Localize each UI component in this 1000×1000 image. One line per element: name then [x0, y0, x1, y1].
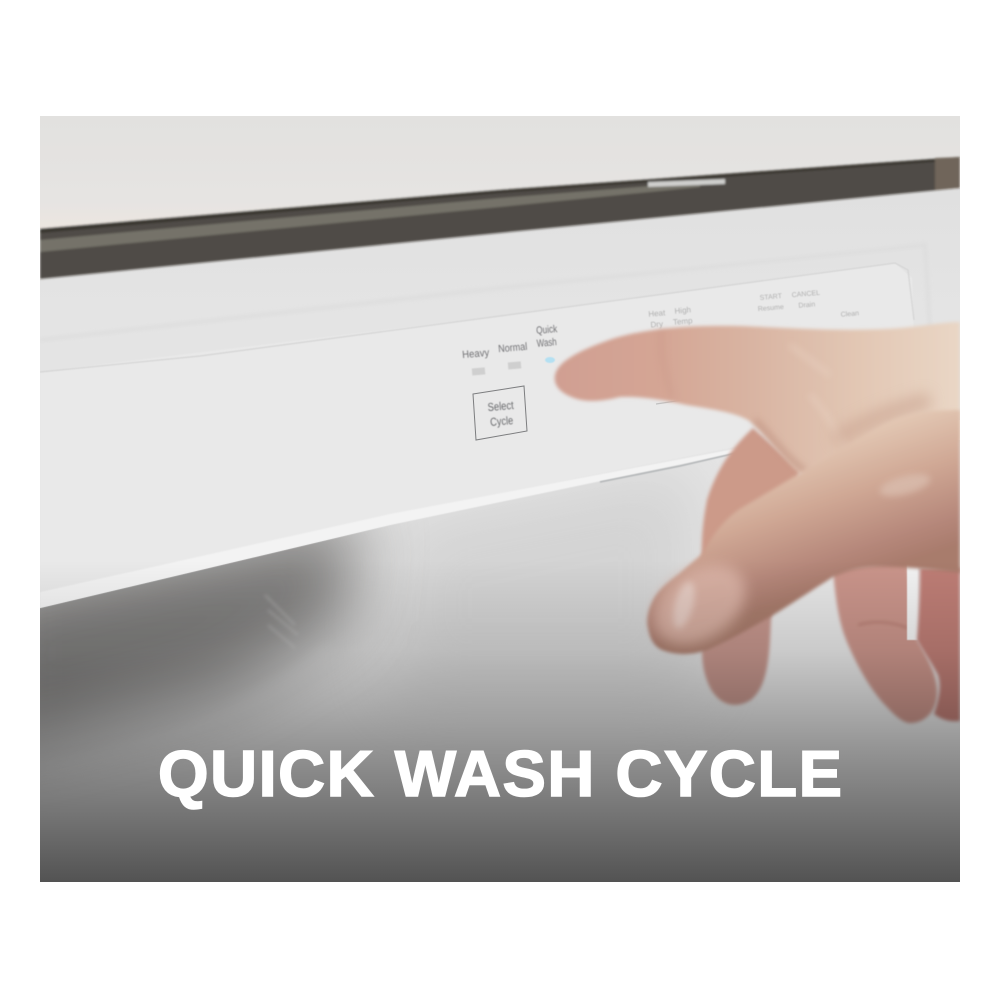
- knuckle creases: [790, 345, 845, 445]
- select cycle button: Cycle: [490, 415, 514, 429]
- button labels: High: [674, 305, 691, 316]
- thumb nail highlight: [672, 580, 696, 629]
- thumb highlight: [880, 473, 930, 498]
- upper counter band: [40, 116, 960, 229]
- dark gap under counter: [40, 157, 960, 279]
- thumb: [647, 410, 960, 654]
- button labels: Normal: [498, 341, 528, 355]
- button labels: Dry: [650, 319, 663, 330]
- hand underside shading: [755, 420, 805, 470]
- photo: dishwasher control panel: [0, 116, 960, 882]
- lower door: [0, 440, 960, 882]
- select cycle button: Select: [487, 400, 515, 414]
- button labels: Quick: [536, 323, 558, 337]
- button labels: Heavy: [462, 347, 490, 361]
- button labels: Heat: [648, 308, 666, 319]
- dark gradient overlay: [40, 560, 960, 882]
- palm shadow above thumb: [835, 400, 930, 440]
- button labels: START: [759, 293, 783, 302]
- button labels: Drain: [798, 301, 816, 310]
- hidden button outline behind finger: [656, 401, 676, 404]
- icon: hand pressing button: [555, 322, 960, 723]
- little finger: [917, 568, 960, 721]
- button labels: Wash: [536, 336, 557, 350]
- button labels: Temp: [673, 316, 693, 327]
- finger joint shading: [662, 330, 672, 398]
- ring finger: [833, 560, 937, 723]
- index finger and back of hand: [555, 322, 960, 480]
- infographic canvas: [40, 116, 960, 882]
- middle finger: [700, 428, 800, 705]
- gap highlight between fingers: [907, 562, 918, 640]
- thumb tip tint: [650, 562, 750, 650]
- indicator lights: [472, 357, 555, 376]
- control panel face: [40, 188, 960, 608]
- button labels: CANCEL: [791, 290, 820, 299]
- button labels: Clean: [840, 310, 859, 319]
- button labels: [462, 290, 859, 361]
- button labels: Resume: [758, 304, 784, 313]
- select cycle button: [473, 386, 527, 440]
- title: QUICK WASH CYCLE: [158, 737, 842, 810]
